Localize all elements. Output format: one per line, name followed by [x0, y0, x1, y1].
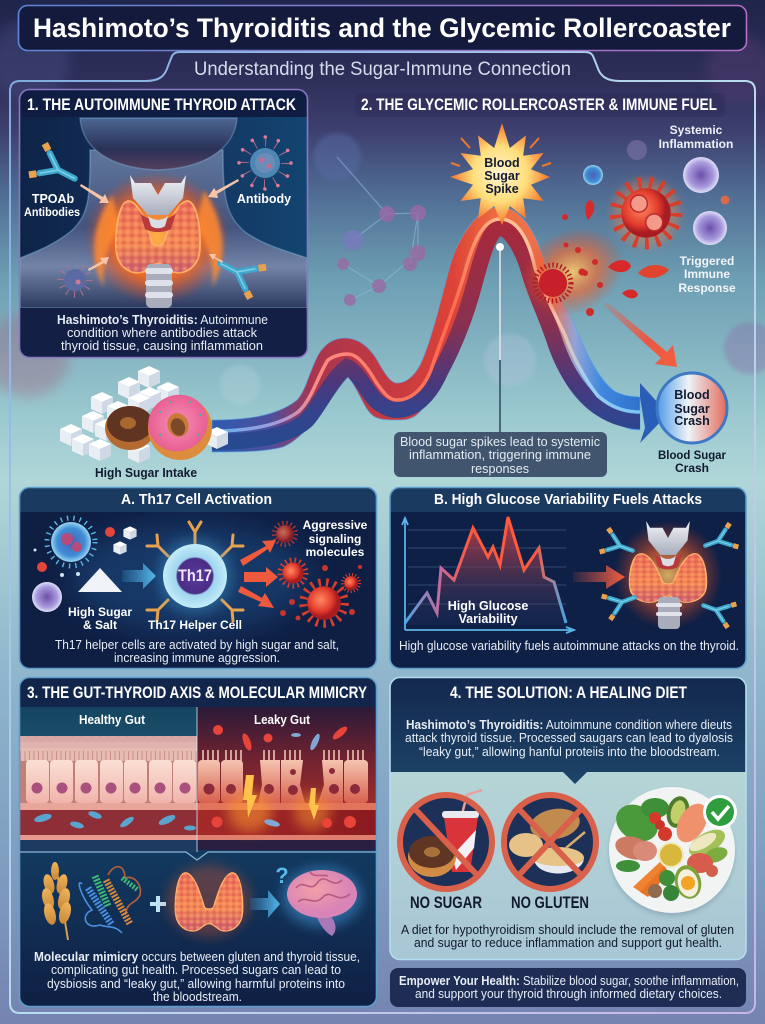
icon: virus lower left: [61, 266, 89, 294]
panel title: B. High Glucose Variability Fuels Attacks: [434, 491, 702, 508]
label: high sugar intake: High Sugar Intake: [95, 465, 197, 480]
icon: salt pile: [78, 568, 122, 592]
blood sugar spike burst: [450, 123, 551, 225]
icon: no gluten: [504, 795, 596, 889]
labels: TPOAb: [32, 192, 75, 206]
neck illustration background: [34, 117, 307, 258]
arrow to Th17 cell: [122, 563, 156, 589]
panel title: A. Th17 Cell Activation: [121, 491, 272, 508]
panel title: 1. THE AUTOIMMUNE THYROID ATTACK: [27, 95, 297, 114]
labels: molecules: [306, 545, 365, 559]
callout box: [394, 432, 607, 477]
divider line: [196, 707, 198, 852]
icon: pasta bowl: [532, 832, 585, 874]
icon: plus: [150, 896, 166, 912]
callout box: Blood sugar spikes lead to systemic: [400, 434, 600, 449]
label: triggered immune response: [678, 254, 736, 295]
crash label: Blood Sugar: [658, 448, 726, 462]
caption: High glucose variability fuels autoimmune attacks on the thyroid.: [399, 638, 739, 653]
icon: brain: [282, 867, 362, 936]
labels: Aggressive: [303, 518, 368, 532]
red arrow to crash: [603, 302, 677, 367]
intro text: Hashimoto’s Thyroiditis: Autoimmune condition where dieuts: [406, 717, 732, 732]
rollercoaster ribbon: [212, 207, 640, 452]
title banner: [18, 6, 746, 50]
label: systemic inflammation: Inflammation: [659, 137, 733, 151]
icon: healthy plate: [609, 787, 737, 916]
blood sugar spike burst: Blood: [484, 156, 520, 170]
blood sugar spike burst: Sugar: [484, 169, 520, 183]
labels: & Salt: [83, 618, 117, 632]
blood sugar crash circle: Sugar: [674, 402, 710, 416]
icon: purple cell: [32, 582, 62, 612]
icon: protein molecule: [79, 867, 140, 933]
labels: Th17 Helper Cell: [148, 618, 242, 632]
explosion of immune cells: [505, 196, 730, 333]
arrow head at end of ribbon: [640, 383, 668, 443]
icon: chin: [80, 118, 237, 170]
icon: antibody upper left: [28, 142, 78, 182]
caption: increasing immune aggression.: [114, 650, 280, 665]
intro text: attack thyroid tissue. Processed saugars can lead to dyølosis: [405, 730, 733, 745]
label: no sugar: NO SUGAR: [410, 893, 482, 912]
line chart: [402, 517, 574, 633]
panel: 1 the autoimmune thyroid attack: [20, 90, 308, 358]
label: no gluten: NO GLUTEN: [511, 893, 589, 912]
icon: inflammation glow: [85, 172, 229, 304]
caption band: [20, 308, 307, 309]
blood sugar crash circle: [657, 373, 727, 443]
icon: Th17 helper cell: Th17: [178, 567, 212, 585]
panel title: 4. THE SOLUTION: A HEALING DIET: [450, 683, 687, 702]
pointer line from peak to callout: [496, 243, 504, 432]
caption: the bloodstream.: [153, 989, 242, 1004]
blood sugar crash circle: Blood: [674, 388, 710, 402]
labels: [68, 518, 368, 632]
icon: virus upper right: [239, 137, 291, 189]
icon: blue cell: [47, 518, 95, 566]
icon: purple and blue cells: [583, 157, 727, 245]
caption text: [57, 312, 268, 353]
subtitle: Understanding the Sugar-Immune Connection: [194, 59, 571, 80]
panel: A Th17 cell activation: [20, 488, 376, 668]
icon: thyroid cartilage: [130, 175, 186, 232]
signaling molecules: [274, 523, 362, 624]
icon: green check: [703, 795, 737, 829]
caption text: condition where antibodies attack: [67, 325, 257, 340]
caption: Th17 helper cells are activated by high sugar and salt,: [55, 637, 339, 652]
panel: 1 the autoimmune thyroid attack: Antibodies: [24, 205, 80, 219]
panel: 3 gut-thyroid axis and molecular mimicry: Leaky Gut: [254, 712, 311, 727]
icon: no sugar: [400, 790, 492, 889]
diet text: [401, 922, 734, 950]
icon: question mark: ?: [275, 863, 289, 888]
label: triggered immune response: Immune: [684, 267, 730, 281]
panel: 3 gut-thyroid axis and molecular mimicry: [20, 678, 376, 1006]
gut labels: Healthy Gut: [79, 712, 146, 727]
icon: large red immune cell: [613, 180, 679, 246]
caption: complicating gut health. Processed sugars can lead to: [51, 962, 341, 977]
icon: sugar cubes and donuts: [60, 366, 228, 469]
caption: dysbiosis and “leaky gut,” allowing harmful proteins into: [47, 976, 345, 991]
panel: B high glucose variability: [390, 488, 746, 668]
intro text: “leaky gut,” allowing hanful proteiis into the bloodstream.: [419, 744, 720, 759]
decorative background cells: [0, 20, 765, 405]
panel: 2 the glycemic rollercoaster: [60, 93, 736, 480]
label: triggered immune response: Triggered: [680, 254, 734, 268]
caption: Molecular mimicry occurs between gluten and thyroid tissue,: [34, 949, 360, 964]
lower navy section: [20, 850, 376, 954]
background cell network: [337, 140, 647, 306]
crash label: [658, 448, 726, 475]
label: systemic inflammation: Systemic: [670, 123, 723, 137]
crash label: Crash: [675, 461, 709, 475]
callout: empower your health: [390, 968, 746, 1007]
callout: empower your health: Empower Your Health: Stabilize blood sugar, soothe inflammation,: [399, 973, 739, 988]
title text: Hashimoto’s Thyroiditis and the Glycemic Rollercoaster: [33, 13, 731, 43]
callout box: inflammation, triggering immune: [409, 447, 591, 462]
callout box: responses: [471, 461, 529, 476]
callout: empower your health: and support your thyroid through informed dietary choices.: [415, 986, 722, 1001]
blood sugar spike burst: Spike: [485, 182, 519, 196]
icon: inflamed thyroid with antibodies: [600, 521, 738, 629]
caption text: thyroid tissue, causing inflammation: [61, 338, 263, 353]
label: triggered immune response: Response: [678, 281, 736, 295]
leaky gut illustration: [197, 707, 376, 852]
icon: trachea: [145, 264, 173, 308]
panel: 1 the autoimmune thyroid attack: Antibody: [237, 192, 291, 206]
dark header section: [390, 678, 746, 784]
icon: bread: [509, 805, 582, 857]
notch pointer: [20, 852, 376, 860]
caption text: Hashimoto’s Thyroiditis: Autoimmune: [57, 312, 268, 327]
blood sugar crash circle: Crash: [674, 414, 710, 428]
caption: [55, 637, 339, 665]
icon: Th17 helper cell: [147, 522, 243, 621]
labels: High Sugar: [68, 605, 132, 619]
line chart: Variability: [458, 612, 518, 626]
labels: signaling: [309, 532, 361, 546]
icon: thyroid gland: [116, 201, 200, 273]
panel: 4 the solution, a healing diet: [390, 678, 746, 960]
diet text: and sugar to reduce inflammation and support gut health.: [414, 935, 722, 950]
icon: arrow to brain: [250, 890, 280, 918]
caption: [34, 949, 360, 1004]
icon: neck and shoulders: [20, 150, 307, 308]
icon: wheat: [40, 862, 73, 940]
line chart: High Glucose: [448, 599, 528, 613]
red arrows out: [238, 540, 278, 608]
diet text: A diet for hypothyroidism should include the removal of gluten: [401, 922, 734, 937]
icon: soda cup: [442, 790, 482, 872]
icon: chocolate donut: [408, 836, 456, 877]
icon: thyroid: [167, 865, 251, 937]
arrow to thyroid: [573, 565, 625, 589]
icon: sugar crystals and red dots: [34, 526, 137, 577]
panel title: 3. THE GUT-THYROID AXIS & MOLECULAR MIMICRY: [27, 683, 368, 702]
label: systemic inflammation: [659, 123, 733, 151]
arrows pointing at thyroid: [80, 179, 239, 271]
intro text: [405, 717, 733, 759]
icon: antibody lower right: [217, 261, 266, 300]
healthy gut illustration: [20, 707, 197, 852]
